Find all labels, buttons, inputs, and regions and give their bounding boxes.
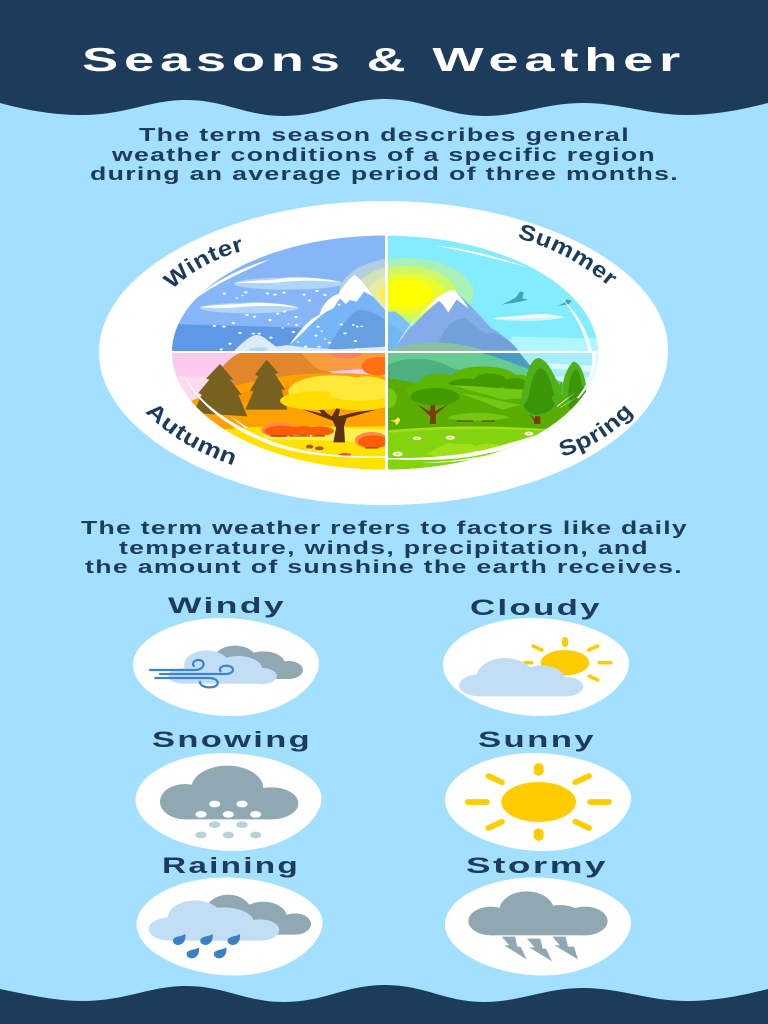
seasons wheel panel [99,201,668,505]
white sweep strokes [388,435,536,460]
weather card: Raining [136,853,322,976]
weather card: Windy [133,593,319,716]
pine trees [193,360,287,416]
four-season illustration [170,230,605,471]
blob: Windy [133,618,319,716]
icon: wind and clouds [150,646,303,687]
header wave band [0,0,768,116]
broadleaf tree [410,384,460,424]
intro text block: during an average period of three months. [90,163,679,184]
title: Seasons & Weather [82,41,686,78]
poplar trees [521,358,589,424]
autumn quadrant [172,353,385,470]
icon: sun behind cloud [459,640,611,696]
weather card: Stormy [445,853,631,976]
yellow tree [280,375,395,442]
heading: Sunny: Sunny [478,727,596,752]
icon: rain cloud [149,895,311,958]
white oval backdrop [99,201,668,505]
red bushes [261,423,389,449]
footer wave band [0,985,768,1024]
weather text block [81,517,688,577]
blob: Sunny [445,753,631,851]
season label: Summer: Summer [519,225,616,284]
mushrooms [306,445,351,456]
weather card: Snowing [136,727,322,851]
spring quadrant [388,353,598,470]
season label: Spring: Spring [560,406,634,456]
weather card: Cloudy [443,595,629,716]
heading: Windy: Windy [168,593,286,618]
weather card: Sunny [445,727,631,851]
intro text block: weather conditions of a specific region [111,144,656,165]
season label: Winter: Winter [162,239,242,287]
bushes and hills [380,366,536,421]
blob: Cloudy [443,618,629,716]
heading: Snowing: Snowing [152,727,312,752]
blob: Stormy [445,878,631,976]
icon: snow cloud [160,766,298,838]
weather text block: The term weather refers to factors like daily [81,517,688,538]
blob: Snowing [136,753,322,851]
heading: Cloudy: Cloudy [470,595,602,620]
lower meadow [385,427,555,470]
summer quadrant [388,236,598,351]
butterfly and flowers [390,417,533,456]
blob: Raining [136,878,322,976]
intro text block: The term season describes general [139,124,630,145]
icon: storm cloud [468,891,608,961]
weather text block: temperature, winds, precipitation, and [119,537,649,558]
winter quadrant [172,236,385,351]
heading: Raining: Raining [162,853,300,878]
weather text block: the amount of sunshine the earth receives. [85,556,683,577]
intro text block [90,124,679,184]
icon: sun [468,768,609,836]
heading: Stormy: Stormy [466,853,608,878]
season label: Autumn: Autumn [145,406,235,465]
